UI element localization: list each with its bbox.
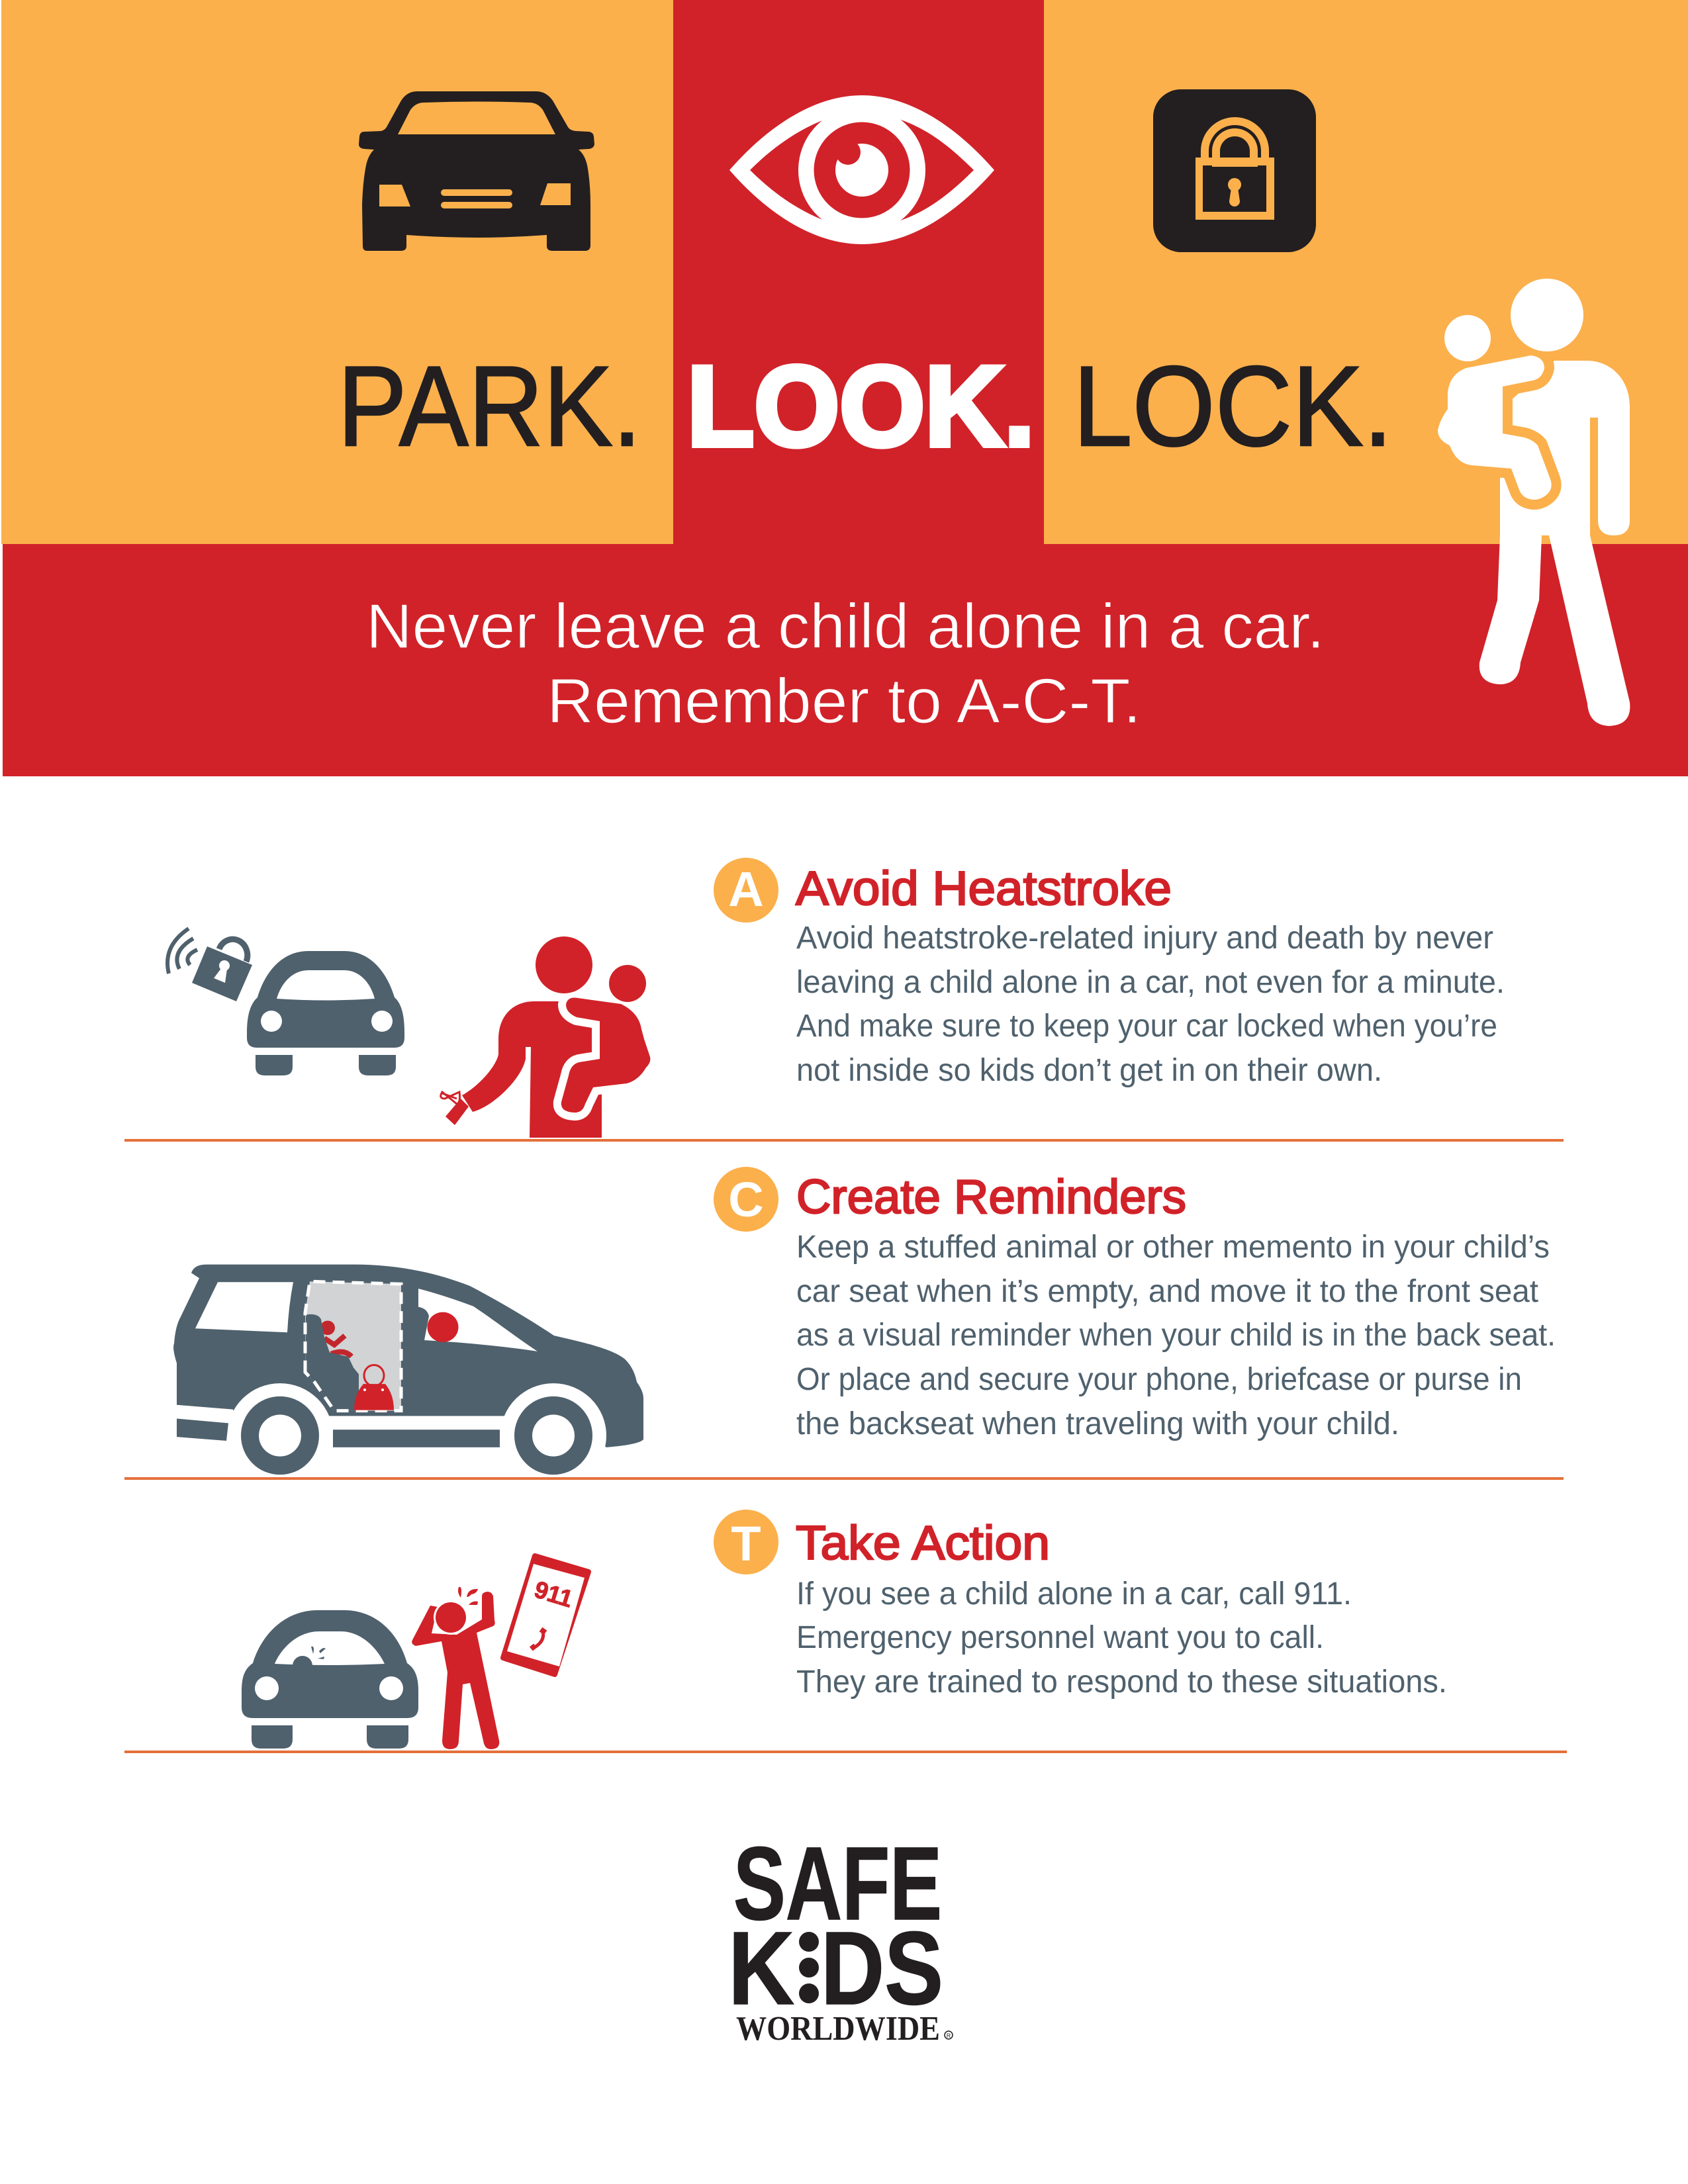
rule [124, 1477, 1564, 1480]
icon: red adult carrying child with keys [441, 936, 650, 1138]
icon: van [173, 1265, 643, 1488]
panel: avoid heatstroke illustration [167, 929, 650, 1138]
panel: take action text [714, 1510, 1447, 1700]
body: avoid heatstroke: And make sure to keep your car locked when you’re [796, 1009, 1497, 1044]
icon: remote lock signal [167, 929, 252, 1001]
badge A [714, 858, 778, 923]
body: create reminders: as a visual reminder when your child is in the back seat. [796, 1318, 1556, 1353]
icon: padlock [1153, 89, 1316, 252]
panel: take action illustration [242, 1556, 588, 1749]
rule [124, 1751, 1567, 1753]
badge A: A [728, 862, 764, 917]
logo: safe kids worldwide: WORLDWIDE [736, 2010, 940, 2048]
icon: worried person on phone [412, 1587, 499, 1749]
logo: safe kids worldwide: DS [821, 1911, 943, 2026]
title: park look lock: PARK. [338, 343, 641, 470]
logo: safe kids worldwide: R [947, 2032, 951, 2039]
rule [124, 1139, 1564, 1142]
icon: car with child inside [242, 1610, 418, 1749]
icon: locked car [247, 951, 404, 1075]
body: take action [796, 1576, 1447, 1700]
title: park look lock [338, 343, 1393, 470]
body: take action: They are trained to respond to these situations. [796, 1664, 1447, 1700]
open door with car seat and purse [305, 1281, 401, 1411]
body: avoid heatstroke [796, 921, 1505, 1088]
panel: create reminders text [714, 1167, 1556, 1441]
badge C [714, 1167, 778, 1232]
icon: car front [359, 91, 594, 251]
body: avoid heatstroke: leaving a child alone in a car, not even for a minute. [796, 965, 1505, 1000]
subtitle: Remember to A-C-T. [547, 666, 1141, 737]
logo: safe kids worldwide: K [728, 1911, 794, 2026]
badge C: C [728, 1172, 764, 1227]
title: park look lock: LOCK. [1073, 343, 1393, 470]
body: create reminders: Or place and secure your phone, briefcase or purse in [796, 1362, 1522, 1397]
heading: create reminders: Create Reminders [796, 1171, 1186, 1224]
icon: eye [729, 95, 994, 244]
body: avoid heatstroke: not inside so kids don’t get in on their own. [796, 1053, 1382, 1088]
body: create reminders: the backseat when traveling with your child. [796, 1406, 1399, 1441]
body: take action: If you see a child alone in a car, call 911. [796, 1576, 1352, 1612]
badge T: T [731, 1516, 761, 1571]
body: avoid heatstroke: Avoid heatstroke-related injury and death by never [796, 921, 1493, 956]
heading: avoid heatstroke: Avoid Heatstroke [796, 862, 1172, 915]
logo: safe kids worldwide: SAFE [733, 1826, 942, 1942]
heading: take action: Take Action [796, 1517, 1050, 1570]
body: create reminders [796, 1230, 1556, 1441]
panel: avoid heatstroke text [714, 858, 1505, 1088]
logo: safe kids worldwide [728, 1826, 953, 2048]
badge T [714, 1510, 778, 1574]
title: park look lock: LOOK. [687, 343, 1035, 470]
icon: phone dialling 911: 911 [532, 1575, 576, 1613]
body: create reminders: car seat when it’s empty, and move it to the front seat [796, 1274, 1538, 1309]
subtitle: Never leave a child alone in a car. [366, 591, 1325, 662]
subtitle [366, 591, 1325, 737]
icon: white adult carrying child [1438, 279, 1630, 726]
icon: phone dialling 911 [503, 1556, 588, 1674]
panel: create reminders illustration [173, 1265, 643, 1488]
body: take action: Emergency personnel want you to call. [796, 1620, 1324, 1655]
header panel [1, 0, 1688, 776]
body: create reminders: Keep a stuffed animal or other memento in your child’s [796, 1230, 1550, 1265]
